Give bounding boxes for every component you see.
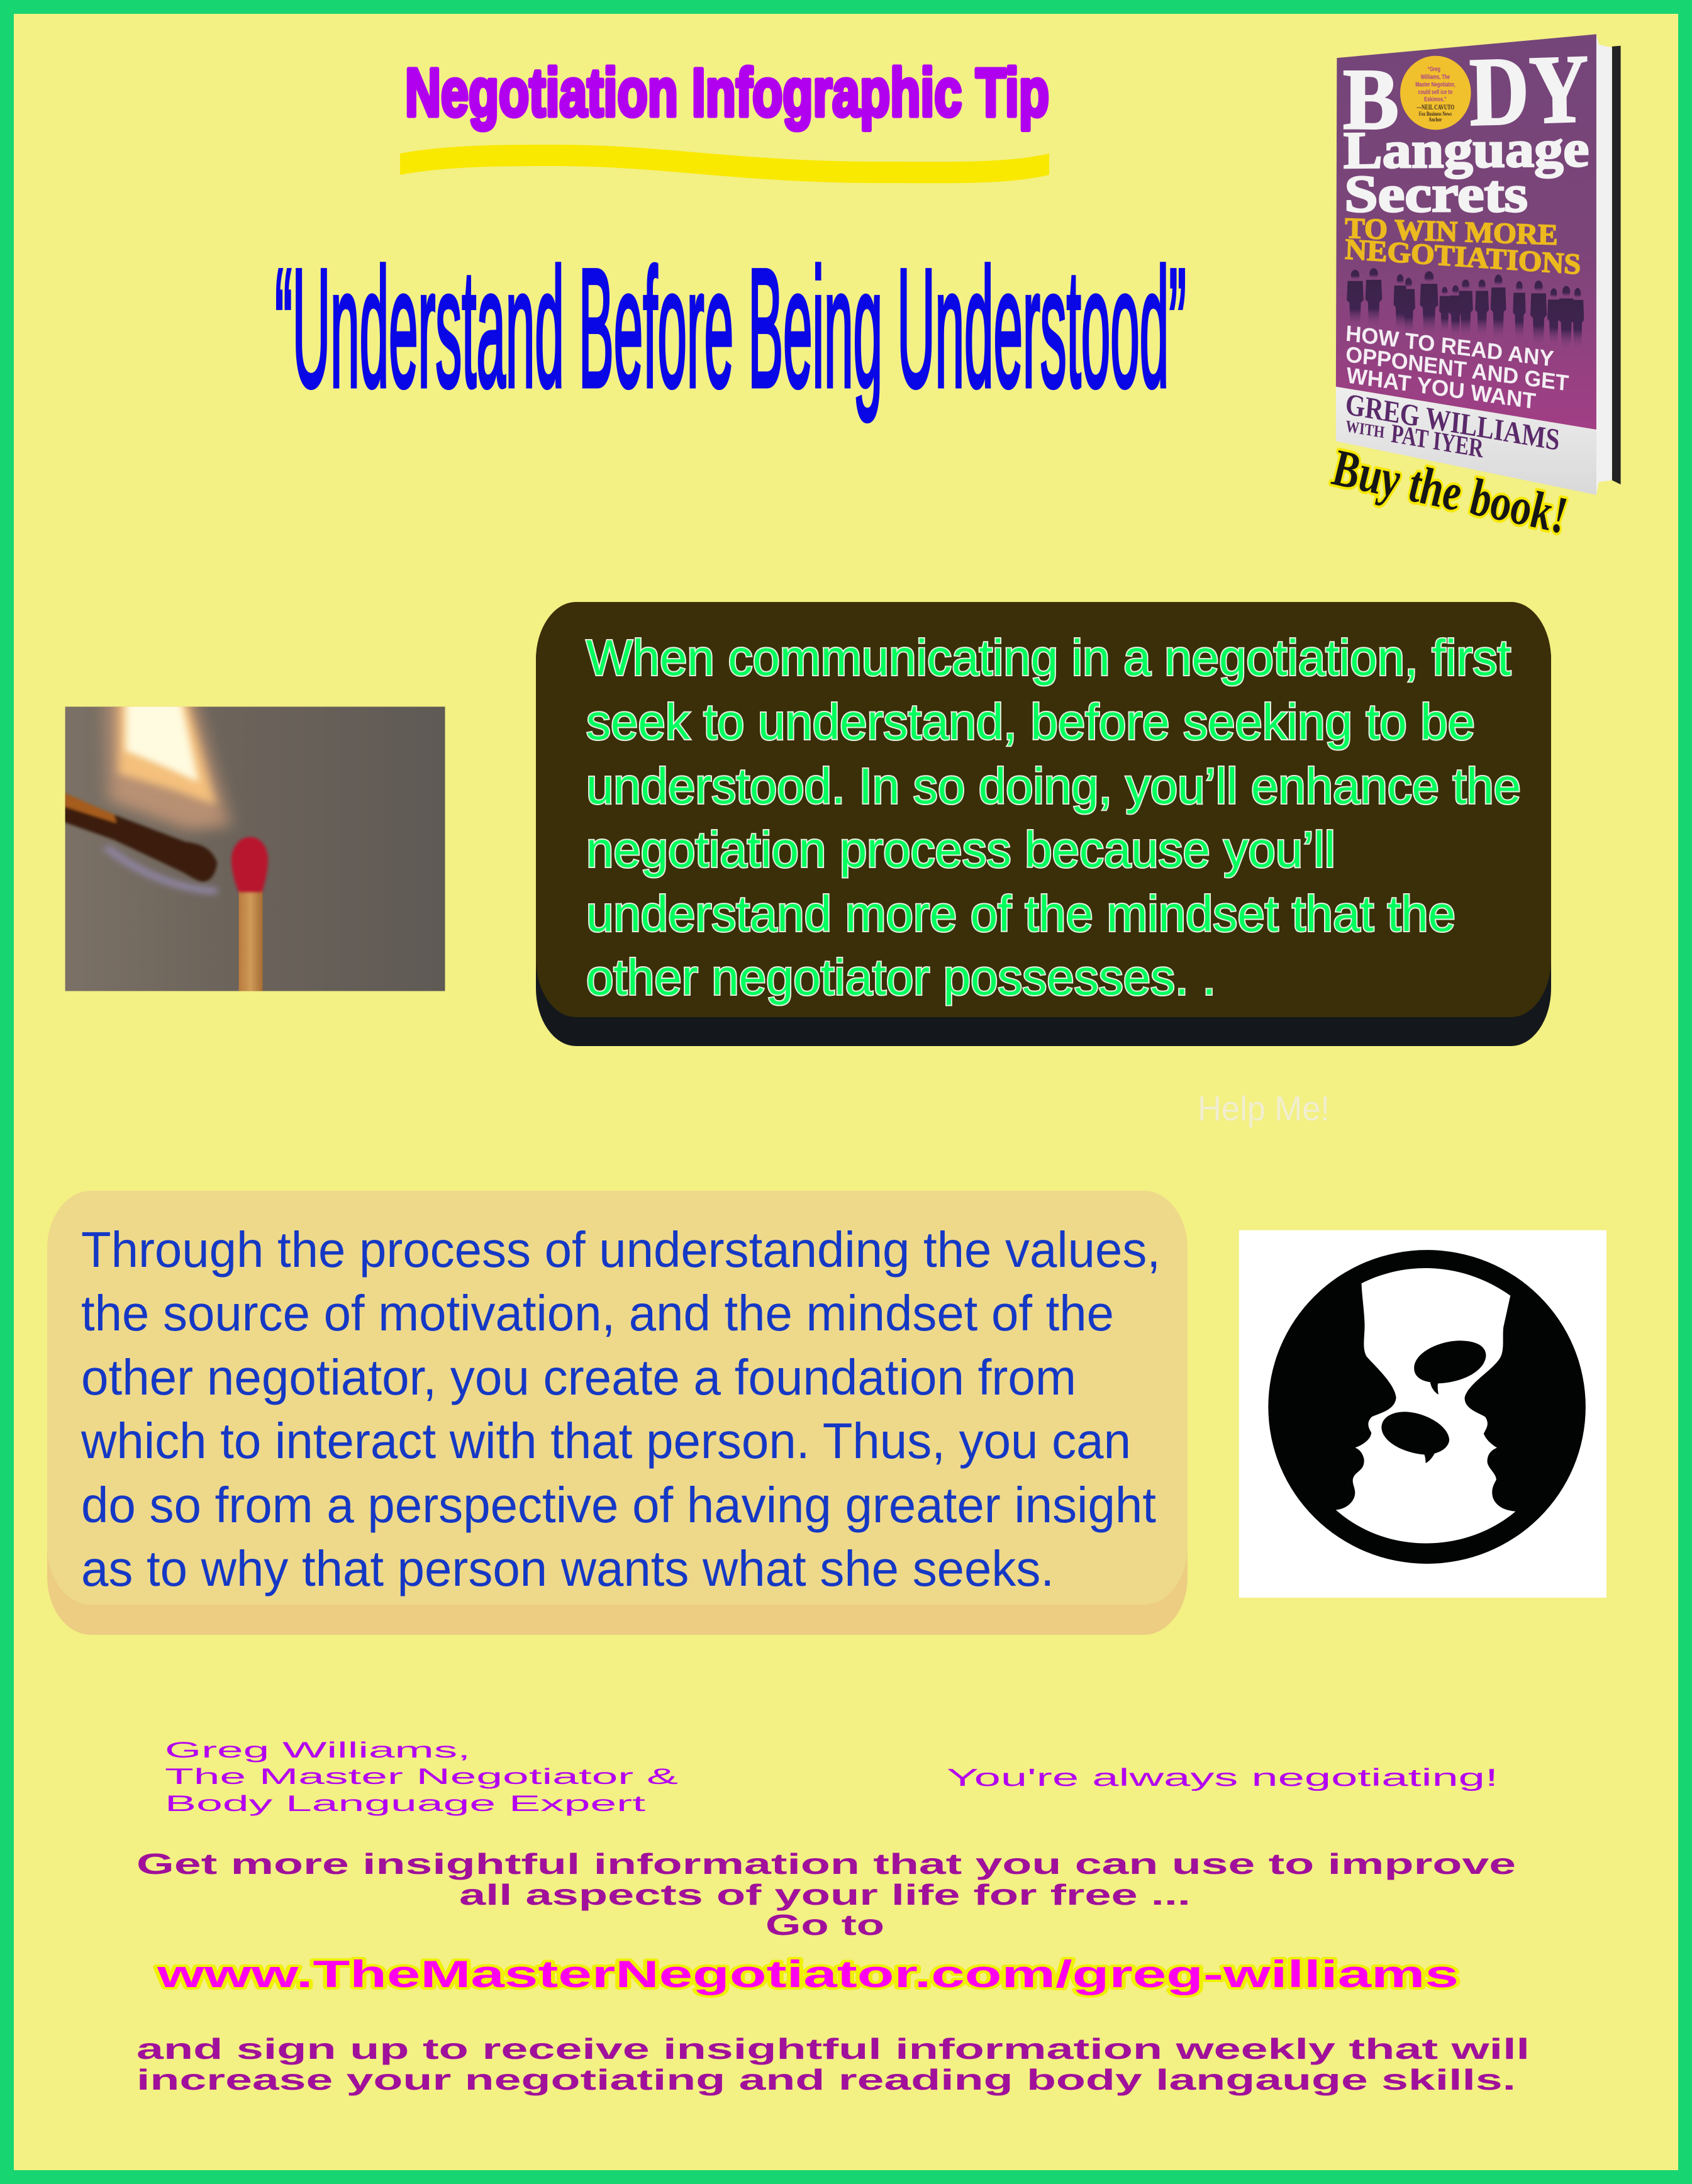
author credit block: Greg Williams, (165, 1738, 470, 1763)
invitation text: Get more insightful information that you can use to improve (136, 1847, 1516, 1880)
book author names: WITH (1345, 417, 1385, 442)
icon: two faces with speech bubbles (1239, 1230, 1606, 1598)
book title words (1343, 34, 1589, 223)
book seal badge: Anchor (1428, 116, 1442, 123)
faint Help Me text: Help Me! (1198, 1089, 1330, 1128)
book seal badge: Master Negotiator, (1415, 81, 1455, 88)
dark callout text (586, 630, 1521, 1005)
blue glow under burnt match (106, 847, 217, 891)
author credit block (165, 1738, 678, 1816)
dark callout face (536, 602, 1551, 1017)
buy the book call to action: Buy the book! (1329, 437, 1570, 545)
dark callout text: When communicating in a negotiation, first (586, 630, 1511, 686)
icon upper speech bubble (1414, 1340, 1486, 1395)
book tagline: WHAT YOU WANT (1345, 363, 1537, 414)
author credit block: The Master Negotiator & (165, 1764, 678, 1789)
book white author band (1336, 387, 1596, 495)
book tagline: OPPONENT AND GET (1345, 342, 1570, 396)
dark callout text: understand more of the mindset that the (586, 886, 1455, 942)
sign-up text: and sign up to receive insightful information weekly that will (136, 2032, 1530, 2065)
dark callout shadow (536, 602, 1551, 1046)
heading: Negotiation Infographic Tip: Negotiation Infographic Tip (405, 54, 1049, 130)
tan callout text: as to why that person wants what she seeks. (81, 1540, 1054, 1596)
dark callout text: negotiation process because you’ll (586, 822, 1335, 878)
tan callout text (81, 1222, 1160, 1596)
photo: two matches, one burning (64, 696, 445, 993)
book subtitle gold: NEGOTIATIONS (1345, 232, 1581, 281)
invitation text: Go to (765, 1908, 884, 1941)
sign-up text (136, 2032, 1530, 2096)
book front purple cover (1336, 34, 1596, 430)
tan callout text: do so from a perspective of having greater insight (81, 1477, 1156, 1533)
tan callout text: which to interact with that person. Thus, you can (81, 1413, 1131, 1469)
author credit block: Body Language Expert (165, 1791, 646, 1816)
book subtitle gold: TO WIN MORE (1345, 211, 1558, 251)
book seal badge (1400, 56, 1471, 130)
tagline: You're always negotiating: You're always negotiating! (947, 1764, 1498, 1791)
burnt match stick (64, 793, 217, 882)
flame glow (106, 696, 230, 830)
invitation text (136, 1847, 1516, 1941)
icon lower speech bubble (1381, 1412, 1449, 1463)
panel: dark callout (536, 602, 1551, 1046)
book seal badge: Williams, The (1421, 73, 1450, 81)
dark callout text: understood. In so doing, you’ll enhance the (586, 758, 1521, 814)
icon white vase between faces (1336, 1268, 1515, 1544)
book author names: PAT IYER (1390, 418, 1485, 464)
tan callout face (47, 1191, 1188, 1605)
book seal badge: “Greg (1427, 65, 1440, 73)
invitation text: all aspects of your life for free ... (459, 1878, 1191, 1911)
book seal badge: could sell ice to (1418, 88, 1453, 96)
book title words: B (1343, 51, 1399, 147)
unlit match stick (239, 890, 263, 993)
book seal badge: Eskimos.” (1424, 96, 1447, 103)
book tagline: HOW TO READ ANY (1345, 321, 1555, 372)
book seal badge: Fox Business News (1419, 111, 1452, 118)
red match head (231, 837, 268, 892)
book subtitle gold (1345, 211, 1581, 281)
dark callout text: other negotiator possesses. . (586, 949, 1216, 1005)
website link: www.TheMasterNegotiator.com/greg-williams (156, 1953, 1459, 1995)
photo grey background (65, 706, 445, 991)
book title words: Language (1344, 120, 1589, 180)
tan callout text: other negotiator, you create a foundation from (81, 1349, 1076, 1405)
book silhouettes of people (1347, 268, 1584, 350)
sign-up text: increase your negotiating and reading body langauge skills. (136, 2063, 1516, 2096)
flame core (126, 696, 199, 782)
book tagline (1345, 321, 1570, 414)
icon black circle (1268, 1250, 1586, 1564)
tan callout text: Through the process of understanding the values, (81, 1222, 1160, 1278)
tan callout shadow (47, 1191, 1188, 1635)
book spine and pages (1596, 34, 1621, 495)
book seal badge: —NEIL CAVUTO (1416, 104, 1454, 112)
dark callout text: seek to understand, before seeking to be (586, 694, 1475, 750)
flame orange body (119, 696, 216, 805)
book title words: Secrets (1344, 165, 1528, 223)
tan callout text: the source of motivation, and the mindset of the (81, 1285, 1114, 1341)
book title words: DY (1469, 34, 1589, 146)
panel: tan callout (47, 1191, 1188, 1635)
book cover: Body Language Secrets (1329, 34, 1621, 545)
yellow wavy underline (400, 145, 1049, 183)
icon white square (1239, 1230, 1606, 1598)
book author names: GREG WILLIAMS (1344, 387, 1561, 458)
